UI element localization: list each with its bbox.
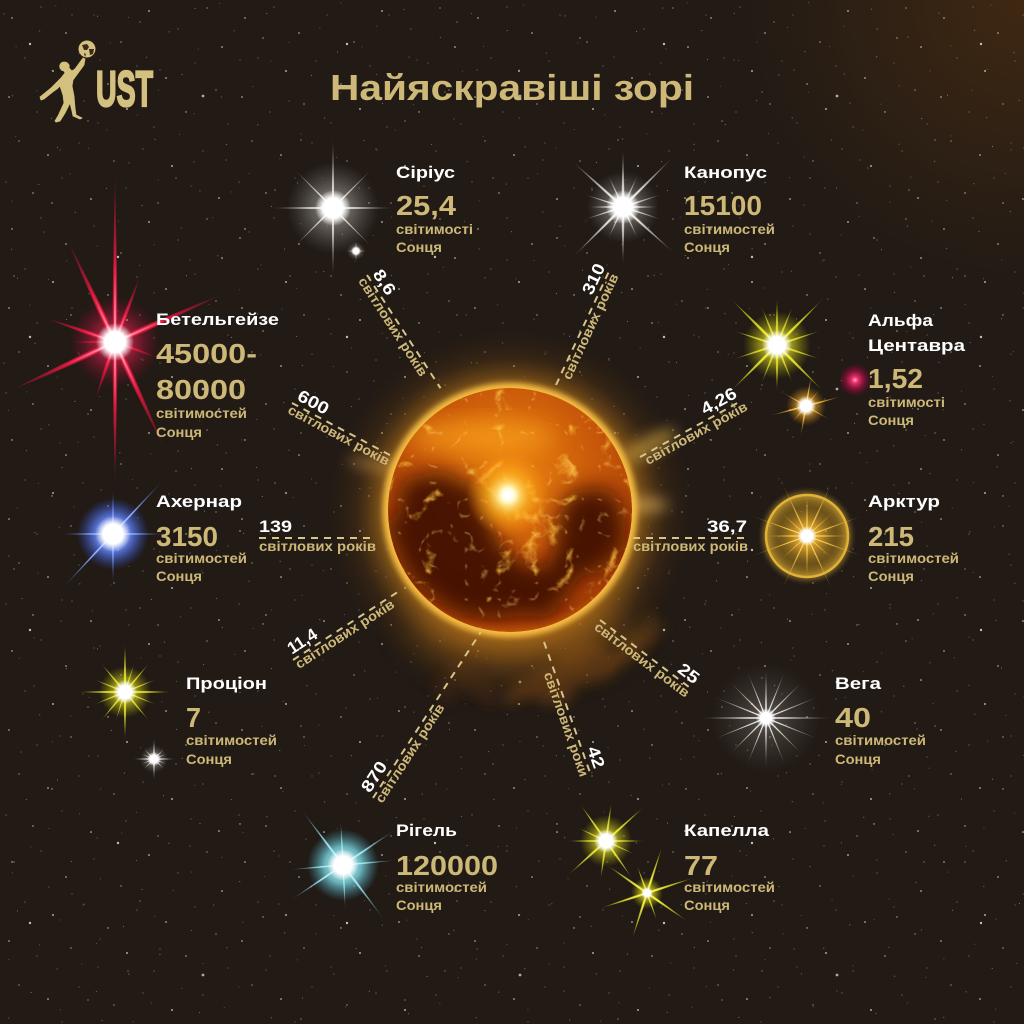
icon: Бетельгейзе star: [4, 165, 228, 490]
text: unit: світимостей: [156, 405, 247, 421]
panel: Арктур: [748, 479, 959, 593]
nebula below the sun: [432, 611, 670, 719]
text: unit 2: Сонця: [396, 897, 442, 913]
text: value: 215: [868, 521, 914, 552]
text: name: Арктур: [868, 493, 940, 511]
panel: Бетельгейзе: [4, 165, 279, 490]
text: unit 2: Сонця: [156, 424, 202, 440]
text: name: Сіріус: [396, 164, 455, 182]
distance: Арктур: 36,7: [707, 517, 747, 536]
icon: Сіріус B: [345, 240, 367, 262]
text: unit 2: Сонця: [684, 239, 730, 255]
icon: globe: [78, 40, 96, 58]
distance: Вега: світлових років: [592, 619, 692, 700]
text: name: Капелла: [684, 822, 770, 840]
distance: Арктур: [633, 517, 748, 554]
logo: UST: [40, 40, 153, 122]
text: name: Проціон: [186, 675, 267, 693]
text: unit: світимостей: [835, 732, 926, 748]
text: UST: UST: [96, 61, 153, 117]
text: unit: світимостей: [156, 550, 247, 566]
text: value: 25,4: [396, 190, 456, 221]
icon: Проціон B: [132, 737, 176, 781]
corona glow: [325, 327, 695, 697]
text: value: 77: [684, 850, 718, 881]
text: value 2: 80000: [156, 374, 246, 405]
distance: Сіріус: світлових років: [355, 274, 430, 379]
text: unit 2: Сонця: [156, 568, 202, 584]
distance: Бетельгейзе: [285, 385, 401, 468]
text: unit 2: Сонця: [868, 568, 914, 584]
icon: Капелла A: [566, 801, 646, 881]
distance: Капелла: [531, 635, 609, 779]
text: unit: світимості: [396, 221, 473, 237]
distance: Проціон: 11,4: [284, 624, 321, 658]
distance: Сіріус: [355, 264, 457, 396]
sun disc: [388, 388, 632, 632]
icon: Проксима Центавра: [838, 363, 872, 397]
distance: Капелла: 42: [583, 744, 608, 771]
text: name: Вега: [835, 675, 882, 693]
panel: Капелла: [566, 801, 775, 941]
text: value: 3150: [156, 521, 218, 552]
text: value: 45000-: [156, 338, 257, 369]
text: name: Рігель: [396, 822, 457, 840]
text: unit 2: Сонця: [396, 239, 442, 255]
distance: Сіріус: 8,6: [369, 266, 400, 299]
panel: Ахернар: [57, 477, 247, 591]
text: value: 1,52: [868, 363, 923, 394]
distance: Ахернар: [259, 517, 376, 554]
icon: Сіріус star: [269, 136, 397, 280]
text: unit: світимостей: [684, 879, 775, 895]
sun with corona: [340, 342, 684, 710]
distance: Рігель: світлових років: [372, 701, 447, 806]
panel: Проціон: [77, 642, 277, 781]
icon: Проціон A: [77, 642, 173, 742]
text: unit: світимостей: [684, 221, 775, 237]
text: value: 120000: [396, 850, 498, 881]
distance: Альфа Центавра: світлових років: [642, 399, 750, 468]
text: unit 2: Сонця: [868, 412, 914, 428]
icon: Альфа Центавра A: [729, 297, 825, 393]
text: unit: світимостей: [868, 550, 959, 566]
distance: Арктур: світлових років: [633, 539, 748, 554]
text: name: Альфа: [868, 312, 934, 330]
panel: Альфа Центавра: [729, 297, 966, 438]
icon: Альфа Центавра B: [769, 374, 843, 438]
icon: boy figure: [40, 58, 85, 122]
distance: Альфа Центавра: 4,26: [698, 384, 740, 419]
icon: Вега star: [696, 663, 836, 773]
distance: Вега: [592, 604, 705, 701]
distance: Канопус: [538, 261, 623, 391]
text: name: Канопус: [684, 164, 767, 182]
icon: Рігель star: [289, 808, 397, 922]
text: unit 2: Сонця: [835, 751, 881, 767]
distance: Бетельгейзе: світлових років: [285, 402, 392, 468]
text: name: Бетельгейзе: [156, 311, 279, 329]
text: value: 15100: [684, 190, 762, 221]
panel: Вега: [696, 663, 926, 773]
text: unit: світимості: [868, 394, 945, 410]
distance: Канопус: 310: [578, 261, 609, 298]
icon: Капелла B: [599, 845, 695, 941]
icon: Канопус star: [570, 147, 676, 267]
distance: Бетельгейзе: 600: [294, 386, 332, 419]
distance: Альфа Центавра: [630, 382, 750, 469]
panel: Канопус: [570, 147, 775, 267]
text: name 2: Центавра: [868, 337, 966, 355]
text: unit 2: Сонця: [186, 751, 232, 767]
icon: Ахернар star: [57, 477, 169, 591]
text: value: 7: [186, 702, 201, 733]
distance: Капелла: світлових роки: [541, 670, 591, 779]
text: unit: світимостей: [186, 732, 277, 748]
title: Найяскравіші зорі: [330, 67, 694, 108]
distance: Ахернар: 139: [259, 517, 292, 536]
distance: Канопус: світлових років: [559, 271, 622, 382]
distance: Вега: 25: [674, 659, 703, 688]
panel: Рігель: [289, 808, 498, 922]
text: value: 40: [835, 702, 871, 733]
distance: Рігель: 870: [357, 758, 391, 796]
distance: Рігель: [356, 621, 493, 806]
text: unit 2: Сонця: [684, 897, 730, 913]
panel: Сіріус: [269, 136, 473, 280]
text: unit: світимостей: [396, 879, 487, 895]
text: name: Ахернар: [156, 493, 242, 511]
icon: Арктур star: [748, 479, 866, 593]
distance: Ахернар: світлових років: [259, 539, 376, 554]
distance: Проціон: [282, 575, 405, 672]
distance: Проціон: світлових років: [292, 597, 397, 672]
